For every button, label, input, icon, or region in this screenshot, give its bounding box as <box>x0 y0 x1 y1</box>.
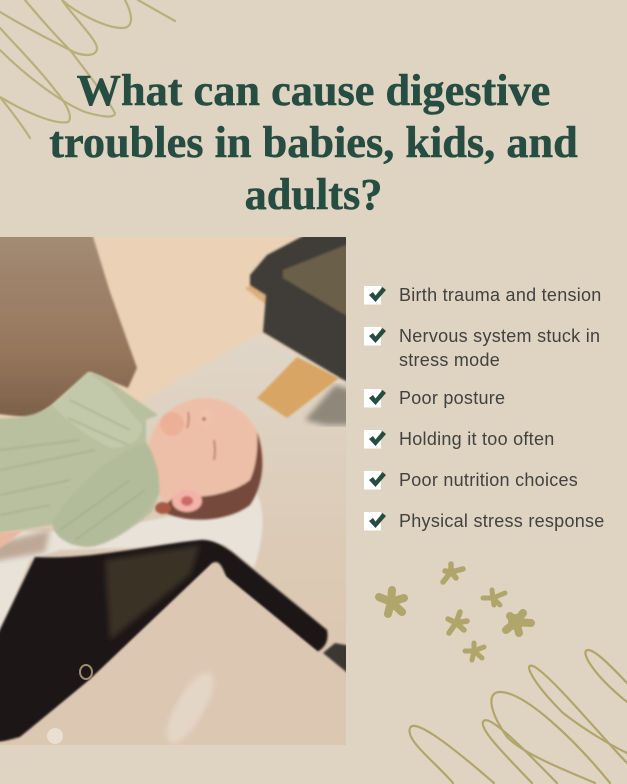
item: physical stress: Physical stress response <box>399 511 605 531</box>
item: poor posture: Poor posture <box>399 388 505 408</box>
item: birth trauma: Birth trauma and tension <box>399 285 602 305</box>
scribble: top left <box>0 0 176 140</box>
brown shirt <box>0 227 137 418</box>
checklist <box>364 285 605 531</box>
title: adults? <box>245 170 382 219</box>
scribble: bottom right <box>408 648 627 784</box>
beige cushion <box>0 562 356 760</box>
wooden chair leg <box>257 357 339 418</box>
title: troubles in babies, kids, and <box>49 118 578 167</box>
photo: newborn held in arms <box>0 237 346 745</box>
item: holding it: Holding it too often <box>399 429 554 449</box>
stars cluster <box>375 561 535 662</box>
white trousers <box>0 490 263 660</box>
item: nervous system <box>364 326 600 370</box>
baby head <box>147 398 263 520</box>
item: nutrition: Poor nutrition choices <box>399 470 578 490</box>
dark chair, top right <box>250 227 360 388</box>
dark chair, bottom <box>0 540 328 742</box>
rug and floor <box>0 333 360 760</box>
title <box>49 66 578 219</box>
title: What can cause digestive <box>77 66 550 115</box>
green sweater <box>0 372 160 547</box>
item: nervous system: Nervous system stuck in <box>399 326 600 346</box>
item: nervous system: stress mode <box>399 350 500 370</box>
